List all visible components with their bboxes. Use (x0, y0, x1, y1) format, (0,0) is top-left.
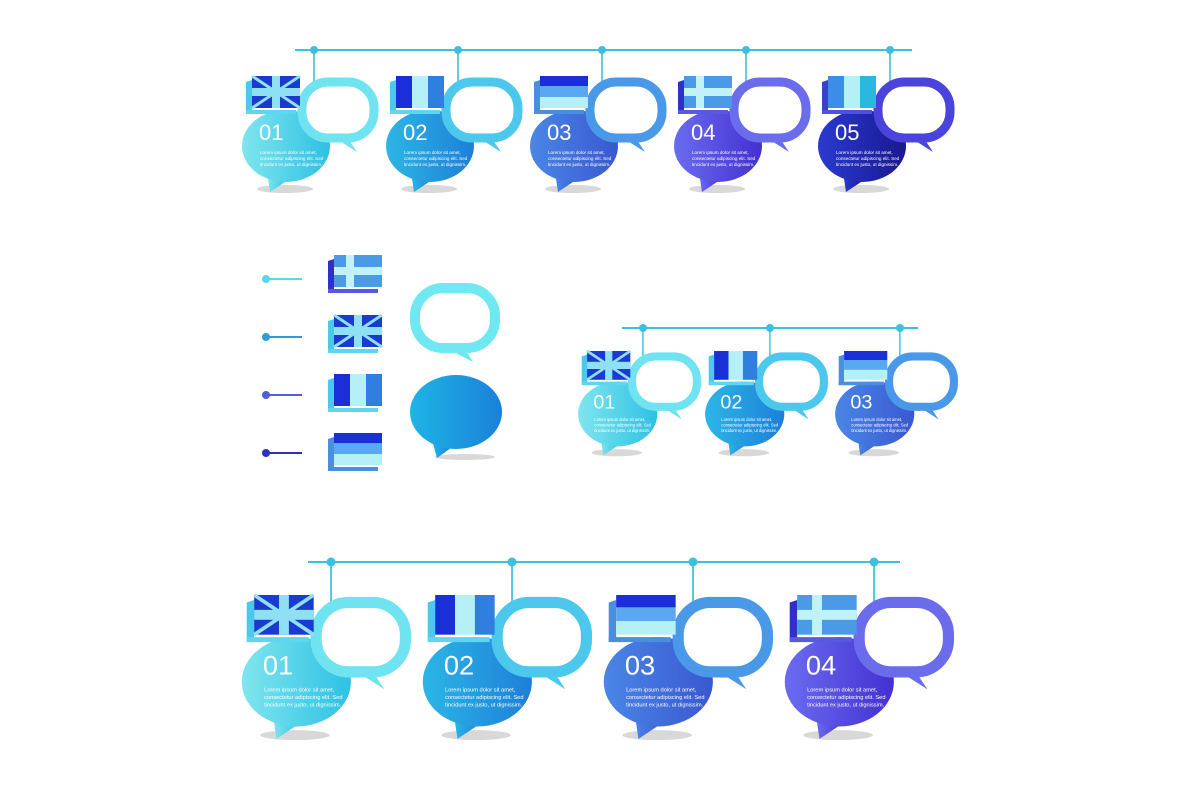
middle item 03: consectetur adipiscing elit. Sed (851, 423, 909, 428)
bottom item 03: tincidunt ex justo, ut dignissim. (626, 703, 704, 709)
bottom item 01: 01 (263, 649, 293, 680)
middle item 02: consectetur adipiscing elit. Sed (721, 423, 779, 428)
top item 04: Lorem ipsum dolor sit amet, (692, 150, 749, 155)
top item 05: 05 (835, 120, 859, 145)
middle item 03 (835, 328, 954, 456)
top item 02 (386, 50, 518, 193)
top item 04: consectetur adipiscing elit. Sed (692, 156, 756, 161)
top item 03: consectetur adipiscing elit. Sed (548, 156, 612, 161)
legend: dots and lines (262, 275, 302, 457)
top item 03: 03 (547, 120, 571, 145)
top item 03: Lorem ipsum dolor sit amet, (548, 150, 605, 155)
bottom item 01: consectetur adipiscing elit. Sed (264, 695, 342, 701)
middle item 03: 03 (850, 392, 872, 414)
middle item 03: tincidunt ex justo, ut dignissim. (851, 428, 907, 433)
middle item 02: Lorem ipsum dolor sit amet, (721, 417, 772, 422)
bottom item 02: 02 (444, 649, 474, 680)
middle item 02: 02 (720, 392, 742, 414)
top item 01: 01 (259, 120, 283, 145)
bottom item 04: tincidunt ex justo, ut dignissim. (807, 703, 885, 709)
bottom row timeline (308, 558, 900, 566)
bottom item 02: Lorem ipsum dolor sit amet, (445, 688, 516, 694)
bottom item 01 (242, 563, 405, 740)
top item 01: Lorem ipsum dolor sit amet, (260, 150, 317, 155)
bottom item 04: consectetur adipiscing elit. Sed (807, 695, 885, 701)
top item 01 (242, 50, 374, 193)
top item 04: 04 (691, 120, 715, 145)
legend: filled bubble (410, 375, 502, 460)
bottom item 01: Lorem ipsum dolor sit amet, (264, 688, 335, 694)
top item 05: consectetur adipiscing elit. Sed (836, 156, 900, 161)
middle item 01: tincidunt ex justo, ut dignissim. (594, 428, 650, 433)
top item 02: tincidunt ex justo, ut dignissim. (404, 162, 466, 167)
bottom item 03: consectetur adipiscing elit. Sed (626, 695, 704, 701)
top item 05 (818, 50, 950, 193)
top row timeline (295, 46, 912, 54)
bottom item 03 (604, 563, 767, 740)
top item 03: tincidunt ex justo, ut dignissim. (548, 162, 610, 167)
top item 01: consectetur adipiscing elit. Sed (260, 156, 324, 161)
middle row timeline (622, 324, 918, 332)
top item 03 (530, 50, 662, 193)
bottom item 04 (785, 563, 948, 740)
middle item 01: 01 (593, 392, 615, 414)
bottom item 03: Lorem ipsum dolor sit amet, (626, 688, 697, 694)
top item 02: 02 (403, 120, 427, 145)
middle item 01: Lorem ipsum dolor sit amet, (594, 417, 645, 422)
middle item 02 (705, 328, 824, 456)
bottom item 04: 04 (806, 649, 836, 680)
bottom item 04: Lorem ipsum dolor sit amet, (807, 688, 878, 694)
top item 01: tincidunt ex justo, ut dignissim. (260, 162, 322, 167)
top item 04 (674, 50, 806, 193)
top item 05: Lorem ipsum dolor sit amet, (836, 150, 893, 155)
bottom item 01: tincidunt ex justo, ut dignissim. (264, 703, 342, 709)
top item 02: consectetur adipiscing elit. Sed (404, 156, 468, 161)
middle item 03: Lorem ipsum dolor sit amet, (851, 417, 902, 422)
bottom item 03: 03 (625, 649, 655, 680)
legend: flags (328, 255, 382, 471)
middle item 01 (578, 328, 697, 456)
middle item 01: consectetur adipiscing elit. Sed (594, 423, 652, 428)
bottom item 02: consectetur adipiscing elit. Sed (445, 695, 523, 701)
top item 04: tincidunt ex justo, ut dignissim. (692, 162, 754, 167)
bottom item 02 (423, 563, 586, 740)
legend: outline bubble (415, 288, 495, 362)
middle item 02: tincidunt ex justo, ut dignissim. (721, 428, 777, 433)
top item 05: tincidunt ex justo, ut dignissim. (836, 162, 898, 167)
bottom item 02: tincidunt ex justo, ut dignissim. (445, 703, 523, 709)
top item 02: Lorem ipsum dolor sit amet, (404, 150, 461, 155)
